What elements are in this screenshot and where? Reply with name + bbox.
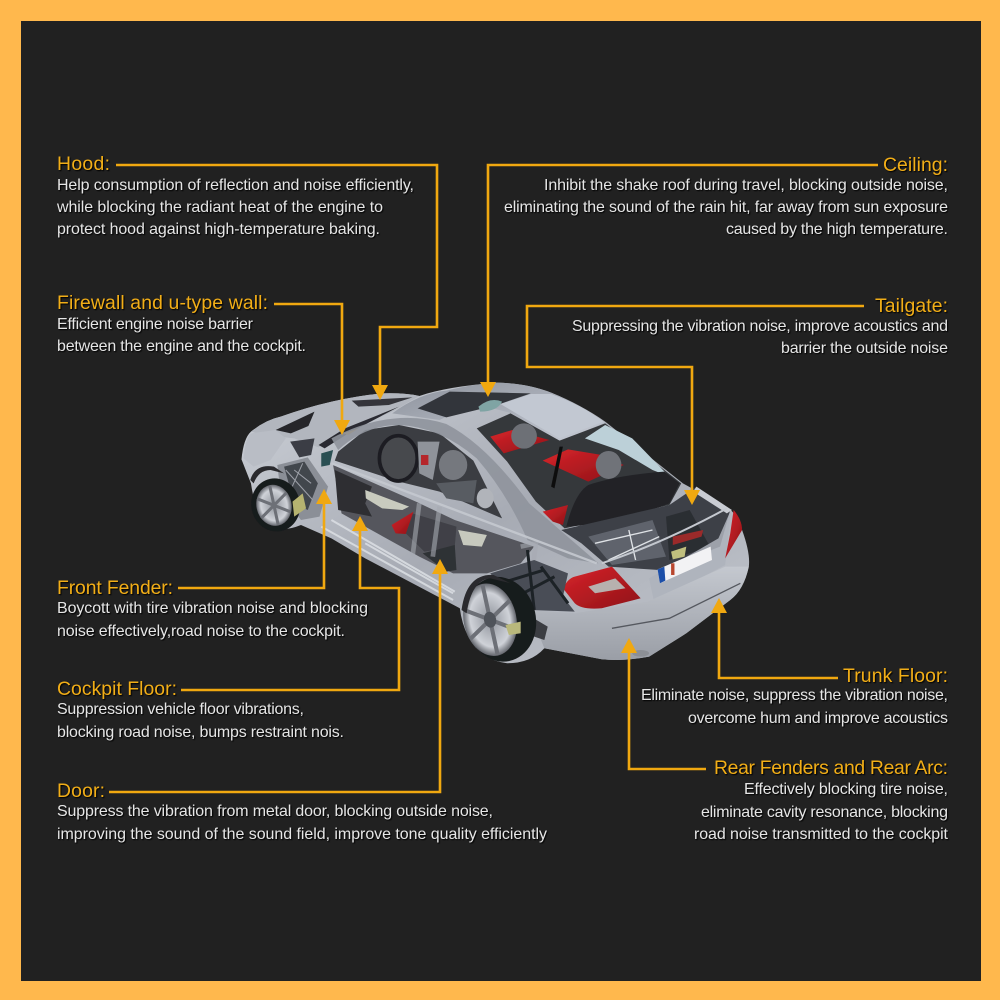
callout: Ceiling xyxy=(504,154,948,238)
heading: Door: Door: xyxy=(57,780,105,802)
text: Front Fender description xyxy=(57,600,368,640)
arrow: Rear Fenders xyxy=(621,638,706,769)
text: Tailgate description: Suppressing the vibration noise, improve acoustics and xyxy=(572,318,948,335)
text: Door description: improving the sound of the sound field, improve tone quality efficiently xyxy=(57,826,547,843)
arrow: Ceiling xyxy=(480,165,878,397)
text: Rear Fenders description: eliminate cavity resonance, blocking xyxy=(701,804,948,821)
text: Tailgate description xyxy=(572,318,948,357)
text: Ceiling description: Inhibit the shake roof during travel, blocking outside noise, xyxy=(544,177,948,194)
arrow: Door xyxy=(109,559,448,792)
callout: Hood xyxy=(56,153,414,238)
heading: Hood: Hood: xyxy=(57,153,110,175)
text: Hood description xyxy=(56,177,414,238)
heading: Cockpit Floor: Cockpit Floor: xyxy=(57,678,177,700)
text: Door description: Suppress the vibration from metal door, blocking outside noise, xyxy=(57,803,493,820)
callout: Rear Fenders and Rear Arc xyxy=(694,757,949,843)
heading: Firewall: Firewall and u-type wall: xyxy=(57,292,268,314)
text: Rear Fenders description: road noise transmitted to the cockpit xyxy=(694,826,949,843)
text: Cockpit Floor description xyxy=(57,701,344,741)
text: Front Fender description: Boycott with tire vibration noise and blocking xyxy=(57,600,368,617)
text: Ceiling description: eliminating the sound of the rain hit, far away from sun exposure xyxy=(504,199,948,216)
text: Trunk Floor description: Eliminate noise, suppress the vibration noise, xyxy=(641,687,948,704)
heading: Front Fender: Front Fender: xyxy=(57,577,173,599)
text: Hood description: Help consumption of reflection and noise efficiently, xyxy=(57,177,414,194)
arrow: Hood xyxy=(116,165,437,400)
text: Firewall description: between the engine and the cockpit. xyxy=(57,338,306,355)
callout: Trunk Floor xyxy=(641,665,948,727)
arrow: Cockpit Floor xyxy=(181,516,399,690)
arrow: Trunk Floor xyxy=(711,598,838,678)
arrow: Front Fender xyxy=(178,489,332,588)
heading: Tailgate: Tailgate: xyxy=(875,295,948,317)
text: Rear Fenders description: Effectively blocking tire noise, xyxy=(744,781,948,798)
text: Front Fender description: noise effectively,road noise to the cockpit. xyxy=(57,623,345,640)
callout: Front Fender xyxy=(57,577,368,640)
text: Tailgate description: barrier the outside noise xyxy=(781,340,948,357)
text: Cockpit Floor description: Suppression vehicle floor vibrations, xyxy=(57,701,304,718)
text: Ceiling description: caused by the high temperature. xyxy=(726,221,948,238)
text: Firewall description: Efficient engine noise barrier xyxy=(57,316,254,333)
heading: Rear Fenders and Rear Arc: Rear Fenders and Rear Arc: xyxy=(714,757,948,779)
text: Trunk Floor description: overcome hum and improve acoustics xyxy=(688,710,948,727)
callout: Door xyxy=(57,780,547,843)
arrow: Tailgate xyxy=(527,306,864,505)
text: Rear Fenders description xyxy=(694,781,949,843)
text: Trunk Floor description xyxy=(641,687,948,727)
text: Cockpit Floor description: blocking road noise, bumps restraint nois. xyxy=(57,724,344,741)
text: Hood description: protect hood against high-temperature baking. xyxy=(57,221,380,238)
text: Ceiling description xyxy=(504,177,948,238)
arrow: Firewall xyxy=(274,304,350,435)
callout: Firewall and u-type wall xyxy=(57,292,306,355)
text: Firewall description xyxy=(57,316,306,355)
callout: Tailgate xyxy=(572,295,948,357)
heading: Ceiling: Ceiling: xyxy=(883,154,948,176)
callout: Cockpit Floor xyxy=(57,678,344,741)
illustration: cutaway car xyxy=(241,383,749,668)
heading: Trunk Floor: Trunk Floor: xyxy=(843,665,948,687)
text: Hood description: while blocking the radiant heat of the engine to xyxy=(56,199,383,216)
text: Door description xyxy=(57,803,547,843)
